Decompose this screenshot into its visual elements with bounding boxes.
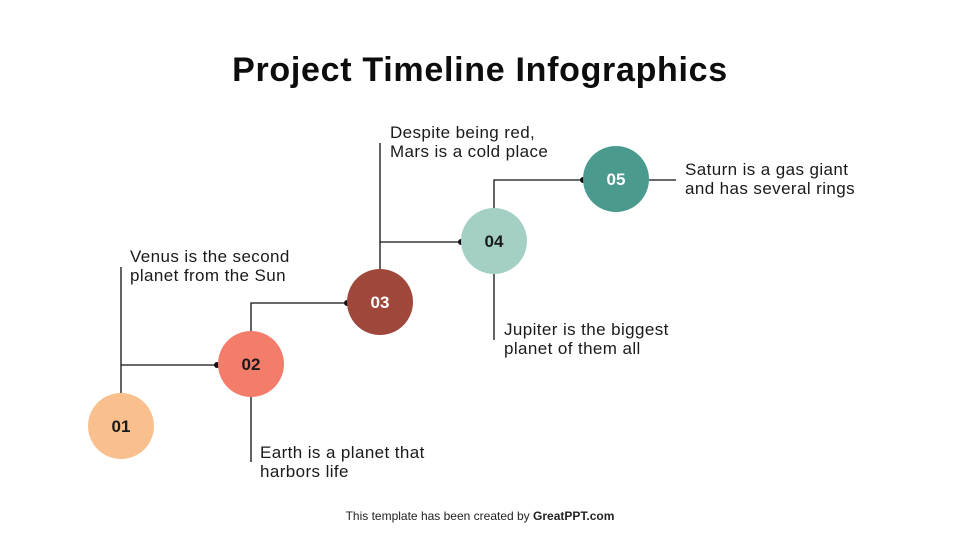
step 05: 05 <box>607 170 625 189</box>
text 02 <box>260 443 425 481</box>
text 04: planet of them all <box>504 339 641 358</box>
text 02: harbors life <box>260 462 349 481</box>
text 03: Despite being red, <box>390 123 535 142</box>
step 04: 04 <box>485 232 504 251</box>
step 04 <box>461 208 527 274</box>
text 02: Earth is a planet that <box>260 443 425 462</box>
text 01: planet from the Sun <box>130 266 286 285</box>
text 03 <box>390 123 548 161</box>
text 05 <box>685 160 855 198</box>
step 03: 03 <box>371 293 389 312</box>
text 01: Venus is the second <box>130 247 290 266</box>
footer: This template has been created by GreatPPT.com <box>346 509 614 523</box>
text 04 <box>504 320 669 358</box>
step 01 <box>88 393 154 459</box>
step 05 <box>583 146 649 212</box>
text 05: and has several rings <box>685 179 855 198</box>
text 05: Saturn is a gas giant <box>685 160 848 179</box>
step 02: 02 <box>242 355 260 374</box>
step 03 <box>347 269 413 335</box>
text 01 <box>130 247 290 285</box>
text 04: Jupiter is the biggest <box>504 320 669 339</box>
text 03: Mars is a cold place <box>390 142 548 161</box>
title: Project Timeline Infographics <box>232 51 728 89</box>
step 02 <box>218 331 284 397</box>
step 01: 01 <box>112 417 130 436</box>
